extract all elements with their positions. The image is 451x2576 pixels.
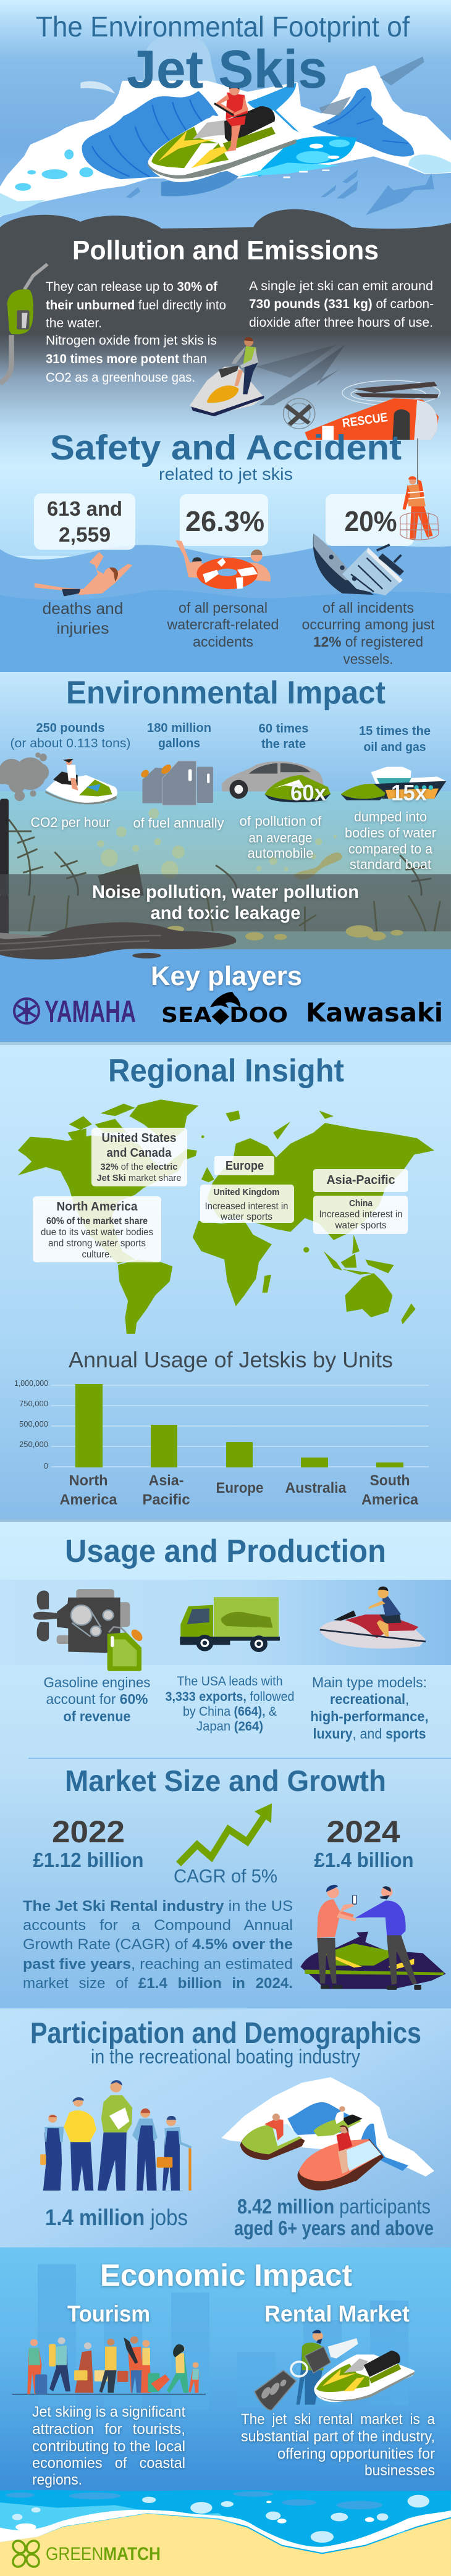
water and sand: [0, 2490, 451, 2576]
text: deaths and injuries: injuries: [57, 619, 109, 637]
text: rental market description: businesses: [365, 2462, 435, 2479]
text: unburned fuel: the water.: [46, 316, 102, 330]
stat card: incidents: [326, 494, 414, 546]
text: rental industry paragraph: Growth Rate (CAGR) of 4.5% over the: [23, 1936, 293, 1953]
text: carbon dioxide emission: dioxide after three hours of use.: [249, 316, 433, 330]
text: gasoline engines: account for 60%: [46, 1691, 148, 1707]
text: dumped into water: dumped into: [354, 809, 427, 824]
heading: safety and accident: Safety and Accident: [50, 428, 402, 468]
logo: kawasaki: Kawasaki: [306, 997, 443, 1028]
callout: asia-pacific: [313, 1169, 408, 1192]
panel: light background behind pollution and safety: [0, 334, 451, 556]
text: tourism description: Jet skiing is a significant: [32, 2404, 185, 2420]
icon: fuel canisters: [140, 761, 213, 805]
callout: asia-pacific: Asia-Pacific: [326, 1173, 395, 1187]
text: watercraft accidents: watercraft-related: [166, 616, 279, 632]
stat: pounds of CO2 label: (or about 0.113 tons): [10, 737, 131, 750]
callout: united kingdom: United Kingdom: [214, 1187, 279, 1198]
callout: china: China: [349, 1198, 373, 1209]
stat: 2024: [314, 1815, 414, 1871]
callout: north america: North America: [57, 1200, 138, 1214]
stat card: deaths and injuries: 2,559: [59, 523, 111, 546]
stat: fifteen times label: oil and gas: [363, 740, 426, 754]
illustration: drowning swimmer: [35, 552, 132, 597]
chart title: Annual Usage of Jetskis by Units: [69, 1347, 393, 1372]
title: The Environmental Footprint of: [36, 10, 410, 43]
callout: china: [313, 1196, 408, 1234]
text: tourism description: contributing to the local: [32, 2438, 185, 2455]
text: incidents among vessels: occurring among just: [301, 616, 435, 632]
callout: north america: culture.: [82, 1249, 112, 1260]
callout: united kingdom: water sports: [220, 1212, 272, 1222]
y axis labels: 750,000: [19, 1399, 48, 1408]
label: 15x: 15x: [391, 780, 427, 805]
text: exports: 3,333 exports, followed: [166, 1690, 294, 1704]
heading: tourism: Tourism: [67, 2301, 150, 2326]
text: dumped into water: standard boat: [350, 857, 431, 872]
label: 60x: 60x: [290, 780, 326, 805]
text: exports: [166, 1674, 294, 1734]
text: pollution of automobile: automobile: [247, 845, 314, 861]
text: unburned fuel: [46, 280, 226, 385]
callout: china: Increased interest in: [319, 1209, 403, 1220]
text: dumped into water: compared to a: [348, 841, 433, 857]
icon: rider on red jet ski: [319, 1587, 426, 1648]
callout: north america: due to its vast water bodies: [41, 1227, 153, 1238]
text: watercraft accidents: of all personal: [179, 600, 268, 616]
text: co2 per hour: CO2 per hour: [31, 815, 110, 830]
illustration: rescuer on a rope with basket: [400, 438, 439, 540]
y axis labels: 1,000,000: [14, 1378, 48, 1388]
stat: 2024: £1.4 billion: [314, 1848, 414, 1871]
heading: rental market: Rental Market: [264, 2301, 410, 2326]
x axis labels: North: [69, 1472, 107, 1489]
text: deaths and injuries: [42, 599, 124, 637]
stat: sixty times label: the rate: [261, 737, 306, 751]
stat: gallons label: 180 million: [147, 721, 211, 735]
text: participants: 8.42 million participants: [237, 2195, 431, 2218]
text: dumped into water: bodies of water: [345, 825, 436, 841]
bar chart: annual usage of jetskis by units: [14, 1347, 429, 1508]
text: watercraft accidents: accidents: [193, 634, 253, 650]
text: gasoline engines: Gasoline engines: [43, 1674, 151, 1690]
text: rental market description: offering opportunities for: [277, 2446, 435, 2462]
illustration: swimmers with lifebuoy: [175, 540, 271, 589]
heading: regional insight: Regional Insight: [108, 1053, 344, 1089]
callout: united states and canada: and Canada: [106, 1146, 172, 1160]
heading: environmental impact: Environmental Impact: [66, 675, 386, 711]
text: fuel annually: of fuel annually: [133, 815, 224, 831]
panel: regional insight: [0, 1045, 451, 1522]
y axis labels: [14, 1378, 48, 1471]
panel: usage and production: [0, 1522, 451, 1766]
icon: fuel pump nozzle: [0, 264, 48, 383]
illustration: rescue helicopter: [284, 380, 440, 440]
seabed and oil slick: [0, 896, 451, 960]
x axis labels: Asia-: [148, 1472, 184, 1489]
panel: pollution and emissions: [0, 209, 451, 385]
text: unburned fuel: their unburned fuel directly into: [46, 298, 226, 313]
text: exports: The USA leads with: [177, 1674, 283, 1689]
callout: europe: [214, 1156, 274, 1175]
text: pollution of automobile: of pollution of: [240, 813, 322, 829]
text: unburned fuel: They can release up to 30% of: [46, 280, 218, 294]
stat: pounds of CO2 label: [10, 721, 131, 750]
text: dumped into water: [345, 809, 436, 872]
x axis labels: America: [361, 1491, 419, 1508]
text: carbon dioxide emission: 730 pounds (331 kg) of carbon-: [249, 297, 434, 311]
heading: pollution and emissions: Pollution and Emissions: [72, 235, 379, 266]
stat card: personal watercraft: 26.3%: [185, 505, 264, 537]
world map: [18, 1099, 434, 1334]
text: incidents among vessels: of all incidents: [322, 600, 414, 616]
banner text: noise, water pollution and toxic leakage: Noise pollution, water pollution: [92, 882, 359, 902]
stat: gallons label: [147, 721, 211, 750]
text: rental industry paragraph: past five years , reaching an estimated: [23, 1956, 293, 1973]
logo: yamaha: YAMAHA: [44, 994, 136, 1029]
text: rental market description: [241, 2411, 436, 2479]
text: exports: Japan (264): [196, 1719, 263, 1734]
illustration: man with key and jet ski: [255, 2330, 415, 2410]
panel: beach footer: [0, 2490, 451, 2576]
title: Jet Skis: [127, 40, 327, 99]
callout: united kingdom: [200, 1185, 294, 1223]
illustration: jet ski riding a wave: [0, 35, 451, 216]
bars: [75, 1384, 403, 1467]
arrow: growth: [179, 1803, 272, 1864]
logo: greenmatch: GREENMATCH: [46, 2544, 161, 2564]
panel: environmental impact: [0, 672, 451, 949]
stat: sixty times label: [258, 722, 309, 751]
panel: hero background: [0, 0, 451, 241]
callout: north america: 60% of the market share: [46, 1216, 148, 1227]
text: incidents among vessels: [301, 600, 435, 667]
illustration: sinking ship: [313, 534, 404, 595]
callout: united states and canada: Jet Ski market share: [96, 1173, 182, 1183]
stat: fifteen times label: 15 times the: [359, 724, 431, 738]
x axis labels: Australia: [285, 1480, 347, 1496]
text: pollution of automobile: [240, 813, 322, 861]
heading: usage and production: Usage and Production: [65, 1533, 386, 1569]
text: rental market description: The jet ski rental market is a: [241, 2411, 436, 2428]
illustration: workers: [40, 2080, 192, 2191]
text: carbon dioxide emission: A single jet ski can emit around: [249, 279, 433, 293]
text: rental industry paragraph: [23, 1898, 293, 1992]
label: rescue: RESCUE: [342, 411, 389, 430]
text: carbon dioxide emission: [249, 279, 434, 330]
text: incidents among vessels: 12% of registered: [313, 634, 423, 650]
text: tourism description: regions.: [32, 2472, 82, 2488]
x axis labels: Pacific: [142, 1491, 190, 1508]
icon: smoke with jet ski: [0, 752, 117, 804]
y axis labels: 0: [44, 1461, 48, 1471]
y axis labels: 250,000: [19, 1440, 48, 1449]
banner text: noise, water pollution and toxic leakage: [92, 882, 359, 923]
callout: united states and canada: [91, 1128, 187, 1186]
heading: economic impact: Economic Impact: [100, 2258, 352, 2293]
stat: pounds of CO2 label: 250 pounds: [36, 721, 105, 735]
stat card: deaths and injuries: 613 and: [47, 497, 122, 520]
x axis labels: Europe: [216, 1480, 263, 1496]
callout: united kingdom: Increased interest in: [205, 1201, 288, 1212]
heading: participation and demographics: [30, 2017, 421, 2068]
text: rental industry paragraph: accounts for a Compound Annual: [23, 1917, 293, 1934]
callout: north america: [33, 1196, 161, 1262]
title: [36, 10, 410, 99]
icon: boat and jet ski: [341, 767, 446, 800]
text: main type models: luxury, and sports: [313, 1726, 426, 1742]
text: unburned fuel: CO2 as a greenhouse gas.: [46, 371, 195, 385]
illustration: handshake and jet ski: [300, 1885, 446, 1990]
panel: economic impact: [0, 2247, 451, 2494]
stat card: deaths and injuries: [34, 493, 135, 550]
text: cagr: CAGR of 5%: [174, 1865, 277, 1887]
x axis labels: America: [59, 1491, 117, 1508]
panel: participation and demographics: [0, 2008, 451, 2247]
text: rental market description: substantial part of the industry,: [241, 2428, 435, 2445]
stat: gallons label: gallons: [158, 737, 200, 750]
logo: sea-doo: [161, 992, 288, 1028]
heading: safety and accident: related to jet skis: [159, 464, 293, 484]
illustration: jet skis on a wave: [221, 2077, 434, 2191]
text: main type models: recreational,: [330, 1691, 409, 1707]
callout: china: water sports: [335, 1220, 387, 1231]
logo: sea-doo: SEA◆DOO: [161, 1003, 288, 1028]
text: main type models: [310, 1674, 429, 1742]
icon: delivery truck with jet ski: [180, 1597, 280, 1652]
text: jobs: 1.4 million jobs: [45, 2205, 188, 2230]
text: rental industry paragraph: market size of £1.4 billion in 2024.: [23, 1975, 293, 1992]
text: main type models: Main type models:: [312, 1674, 427, 1690]
banner text: noise, water pollution and toxic leakage: and toxic leakage: [151, 903, 300, 923]
logo: greenmatch: [11, 2538, 161, 2569]
y axis labels: 500,000: [19, 1419, 48, 1429]
text: tourism description: economies of coastal: [32, 2455, 185, 2472]
callout: united states and canada: 32% of the electric: [100, 1162, 178, 1172]
panel: safety and accident: [0, 438, 451, 673]
panel: key players: [0, 896, 451, 1045]
illustration: group of tourists: [12, 2336, 206, 2394]
text: watercraft accidents: [166, 600, 279, 650]
text: unburned fuel: 310 times more potent than: [46, 352, 207, 366]
icon: car and jet ski: [222, 761, 331, 802]
text: exports: by China (664), &: [183, 1705, 277, 1719]
heading: safety and accident: [50, 428, 402, 484]
icon: engine and fuel can: [33, 1589, 145, 1671]
heading: key players: Key players: [151, 961, 302, 991]
text: rental industry paragraph: The Jet Ski Rental industry in the US: [23, 1898, 293, 1915]
underwater scene with seaweed and bubbles: [0, 799, 451, 939]
illustration: rider on a yellow jet ski: [190, 337, 345, 416]
callout: north america: and strong water sports: [48, 1238, 146, 1249]
panel: market size and growth: [0, 1758, 451, 2008]
x axis labels: South: [369, 1472, 410, 1489]
text: tourism description: [32, 2404, 185, 2488]
text: unburned fuel: Nitrogen oxide from jet skis is: [46, 334, 217, 348]
text: tourism description: attraction for tourists,: [32, 2421, 185, 2438]
stat card: personal watercraft: [180, 494, 268, 546]
callout: europe: Europe: [225, 1159, 264, 1173]
stat: fifteen times label: [359, 724, 431, 754]
text: gasoline engines: of revenue: [63, 1708, 131, 1724]
stat: sixty times label: 60 times: [258, 722, 309, 736]
text: participants: [234, 2195, 434, 2239]
callout: united states and canada: United States: [101, 1131, 177, 1145]
stat: 2024: 2024: [326, 1815, 400, 1849]
stat: 2022: £1.12 billion: [33, 1848, 143, 1871]
stat card: incidents: 20%: [345, 505, 397, 537]
heading: participation and demographics: in the recreational boating industry: [91, 2045, 360, 2068]
x axis labels: [59, 1472, 419, 1508]
water layers: [0, 545, 451, 673]
text: main type models: high-performance,: [310, 1708, 429, 1724]
text: incidents among vessels: vessels.: [344, 651, 393, 667]
logo: yamaha: [14, 994, 136, 1029]
stat: 2022: 2022: [52, 1815, 125, 1849]
text: pollution of automobile: an average: [248, 830, 313, 845]
text: gasoline engines: [43, 1674, 151, 1724]
heading: market size and growth: Market Size and Growth: [65, 1765, 386, 1798]
text: deaths and injuries: deaths and: [42, 599, 124, 618]
stat: 2022: [33, 1815, 143, 1871]
